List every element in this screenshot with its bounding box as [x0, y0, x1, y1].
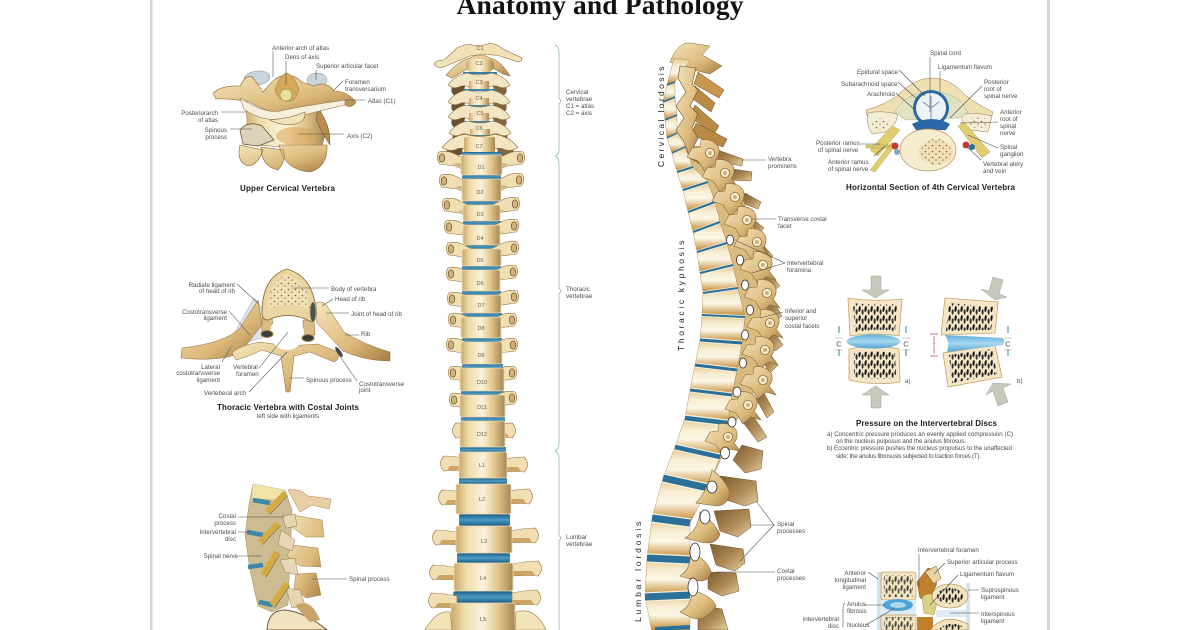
- lumbar costal processes: [680, 470, 730, 619]
- vertebra numbers: D6: [476, 281, 484, 287]
- labels: horizontal section: Subarachnoid space: [841, 81, 898, 88]
- panel: horizontal section of 4th cervical vertebra: [816, 50, 1024, 192]
- labels: lateral view: prominens: [768, 163, 797, 170]
- labels: upper cervical: Axis (C2): [347, 133, 372, 140]
- labels: upper cervical: Posteriorarch: [181, 110, 219, 117]
- labels: lateral view: foramina: [787, 267, 812, 274]
- vertebra numbers: C5: [476, 111, 484, 117]
- labels: spinal regions: vertebrae: [566, 541, 593, 548]
- vertebra numbers: C2: [475, 61, 483, 67]
- subheading: left side: left side with ligaments: [257, 413, 319, 420]
- labels: thoracic vertebra: [176, 282, 405, 397]
- vertebra numbers: D8: [477, 326, 485, 332]
- labels: thoracic vertebra: Costotransverse: [359, 381, 405, 388]
- illustration: lateral spinal column: [645, 43, 783, 630]
- panel: anterior view of the spine: [425, 43, 594, 630]
- vertebra numbers: L2: [479, 497, 485, 503]
- labels: upper cervical: transversarium: [345, 86, 386, 93]
- labels: pressure figures: b): [1017, 378, 1023, 385]
- illustration: horizontal section: [866, 78, 993, 172]
- labels: horizontal section: Spinal: [1000, 144, 1017, 151]
- labels: horizontal section: ganglion: [1000, 151, 1024, 158]
- labels: upper cervical: Atlas (C1): [368, 98, 396, 105]
- labels: pressure figures: C: [903, 340, 909, 348]
- vertebra numbers: L5: [480, 617, 486, 623]
- labels: horizontal section: Posterior ramus: [816, 140, 860, 147]
- disc rims: [645, 167, 745, 597]
- vertebra numbers: D9: [477, 353, 485, 359]
- curvature label: thoracic kyphosis: Thoracic kyphosis: [676, 239, 686, 351]
- labels: motion segment: Interspinous: [981, 611, 1015, 618]
- labels: horizontal section: Ligamentum flavum: [938, 64, 992, 71]
- top of cervical spine: [670, 43, 722, 74]
- illustration a: concentric pressure: [835, 276, 910, 408]
- facet stars: [687, 140, 723, 172]
- labels: upper cervical: Spinous: [205, 127, 227, 134]
- labels: horizontal section: [816, 50, 1024, 175]
- vertebra numbers: C6: [475, 126, 483, 132]
- labels: pressure figures: C: [836, 340, 842, 348]
- labels: spinal regions: vertebrae: [566, 96, 593, 103]
- vertebra numbers: L3: [481, 539, 487, 545]
- labels: lumbar segment: Intervertebral: [200, 529, 236, 536]
- labels: motion segment: Superior articular process: [947, 559, 1018, 566]
- labels: lumbar segment: Spinal process: [349, 576, 390, 583]
- cervical posterior elements: [676, 66, 700, 164]
- labels: pressure figures: a): [905, 378, 911, 385]
- labels: spinal regions: C2 = axis: [566, 110, 592, 117]
- labels: thoracic vertebra: Body of vertebra: [331, 286, 377, 293]
- labels: motion segment: [803, 547, 1019, 630]
- labels: lateral view: facet: [778, 223, 792, 230]
- vertebra numbers: L4: [480, 576, 486, 582]
- labels: lumbar segment: Costal: [218, 513, 236, 520]
- vertebra numbers: [475, 46, 487, 623]
- labels: lumbar segment: disc: [225, 536, 236, 543]
- description text: on the nucleus pulposus and the anulus fibrosus.: [836, 438, 966, 445]
- heading: horizontal section: Horizontal Section of 4th Cervical Vertebra: [846, 183, 1016, 192]
- labels: horizontal section: Spinal cord: [930, 50, 962, 57]
- labels: pressure figures: C: [1005, 340, 1011, 348]
- labels: thoracic vertebra: foramen: [236, 371, 259, 378]
- labels: motion segment: intervertebral: [803, 616, 839, 623]
- labels: thoracic vertebra: Spinous process: [306, 377, 352, 384]
- labels: horizontal section: Anterior: [1000, 109, 1022, 116]
- axis C2: [446, 55, 510, 78]
- labels: upper cervical: [181, 45, 396, 141]
- labels: thoracic vertebra: Radiate ligament: [189, 282, 235, 289]
- labels: lateral view: costal facets: [785, 323, 819, 330]
- labels: lumbar segment: [200, 513, 390, 583]
- description text: side; the anulus fibrosusis subjected to traction forces (T).: [836, 453, 981, 460]
- panel: lumbar spine with nerves: [200, 484, 390, 630]
- labels: lumbar segment: process: [214, 520, 236, 527]
- illustration: atlas and axis: [213, 69, 356, 172]
- labels: motion segment: Intervertebral foramen: [918, 547, 979, 554]
- labels: lateral view: [716, 156, 827, 582]
- labels: thoracic vertebra: Rib: [361, 331, 371, 338]
- labels: spinal regions: vertebrae: [566, 293, 593, 300]
- vertebra numbers: D7: [477, 303, 485, 309]
- panel: lateral view of the spine: [633, 43, 827, 630]
- description text: [827, 431, 1013, 460]
- panel: thoracic vertebra with costal joints: [176, 269, 405, 420]
- labels: thoracic vertebra: costotransverse: [176, 370, 221, 377]
- vertebra numbers: D10: [477, 380, 487, 386]
- description text: b) Eccentric pressure pushes the nucleus propulsus to the unaffected: [827, 445, 1013, 452]
- vertebra numbers: C3: [475, 80, 483, 86]
- labels: lateral view: Intervertebral: [787, 260, 823, 267]
- labels: upper cervical: process: [205, 134, 227, 141]
- labels: horizontal section: root of: [984, 86, 1002, 93]
- vertebra numbers: D11: [477, 405, 487, 411]
- labels: motion segment: Anulus: [847, 601, 866, 608]
- transverse processes: [437, 151, 467, 171]
- labels: horizontal section: and vein: [983, 168, 1007, 175]
- heading: upper cervical vertebra: Upper Cervical Vertebra: [240, 184, 336, 193]
- labels: motion segment: disc: [828, 623, 839, 630]
- labels: horizontal section: spinal: [1000, 123, 1016, 130]
- vertebra numbers: D5: [476, 258, 484, 264]
- heading: pressure on discs: Pressure on the Intervertebral Discs: [856, 419, 998, 428]
- labels: lumbar segment: Spinal nerve: [204, 553, 239, 560]
- labels: lateral view: superior: [785, 315, 807, 322]
- illustration: lumbar segment: [245, 484, 331, 630]
- curvature label: lumbar lordosis: Lumbar lordosis: [633, 520, 643, 622]
- labels: motion segment: Suprospinous: [981, 587, 1019, 594]
- poster left edge: [150, 0, 152, 630]
- labels: upper cervical: Superior articular facet: [316, 63, 379, 70]
- labels: motion segment: Ligamentum flavum: [960, 571, 1014, 578]
- vertebral bodies: [461, 155, 502, 175]
- labels: thoracic vertebra: Head of rib: [335, 296, 366, 303]
- vertebra numbers: C1: [476, 46, 484, 52]
- labels: spinal regions: Thoracic: [566, 286, 590, 293]
- vertebra numbers: D1: [477, 165, 485, 171]
- curvature label: cervical lordosis: Cervical lordosis: [656, 65, 666, 167]
- labels: horizontal section: root of: [1000, 116, 1018, 123]
- labels: thoracic vertebra: Lateral: [201, 364, 220, 371]
- illustration b: eccentric pressure: [930, 277, 1012, 406]
- labels: horizontal section: Vertebral atery: [983, 161, 1024, 168]
- labels: horizontal section: Epidural space: [857, 69, 898, 76]
- labels: spinal regions: Cervical: [566, 89, 588, 96]
- iliac wings: [425, 612, 452, 630]
- labels: horizontal section: nerve: [1000, 130, 1016, 137]
- labels: pressure figures: T: [932, 344, 936, 350]
- panel: motion segment section: [803, 547, 1019, 630]
- labels: motion segment: Nucleus: [847, 622, 869, 629]
- labels: horizontal section: of spinal nerve: [828, 166, 869, 173]
- vertebra numbers: D12: [477, 432, 487, 438]
- braces: [555, 45, 561, 630]
- vertebra numbers: D3: [476, 212, 484, 218]
- labels: horizontal section: spinal nerve: [984, 93, 1018, 100]
- intervertebral foramina: [688, 235, 754, 596]
- labels: lateral view: processes: [777, 575, 805, 582]
- labels: thoracic vertebra: Joint of head of rib: [351, 311, 402, 318]
- labels: lateral view: processes: [777, 528, 805, 535]
- labels: upper cervical: Dens of axis: [285, 54, 319, 61]
- vertebra numbers: C7: [475, 144, 483, 150]
- labels: pressure figures: [836, 340, 1023, 385]
- labels: upper cervical: Anterior arch of atlas: [272, 45, 329, 52]
- labels: lateral view: Costal: [777, 568, 795, 575]
- labels: lateral view: Inferior and: [785, 308, 817, 315]
- labels: motion segment: ligament: [981, 594, 1005, 601]
- atlas C1: [434, 43, 522, 68]
- labels: thoracic vertebra: Vertebral: [233, 364, 258, 371]
- vertebra numbers: D2: [476, 190, 484, 196]
- labels: horizontal section: Arachnoid: [867, 91, 895, 98]
- labels: lateral view: Vertebra: [768, 156, 792, 163]
- labels: thoracic vertebra: of head of rib: [199, 288, 236, 295]
- discs: [645, 82, 745, 629]
- illustration: anterior spinal column: [425, 43, 546, 630]
- labels: horizontal section: of spinal nerve: [818, 147, 859, 154]
- panel: pressure on the intervertebral discs: [827, 276, 1023, 460]
- labels: thoracic vertebra: Costotransverse: [182, 309, 228, 316]
- poster right edge: [1047, 0, 1050, 630]
- labels: motion segment: Anterior: [844, 570, 866, 577]
- labels: motion segment: longitudinal: [835, 577, 866, 584]
- pedicle band joining bodies to posterior elements: [685, 146, 768, 488]
- labels: spinal regions: C1 = atlas: [566, 103, 594, 110]
- labels: thoracic vertebra: joint: [358, 387, 371, 394]
- labels: horizontal section: Posterior: [984, 79, 1009, 86]
- bodies: [645, 58, 745, 630]
- labels: motion segment: fibrosis: [847, 608, 867, 615]
- labels: horizontal section: Anterior ramus: [828, 159, 869, 166]
- labels: motion segment: ligament: [843, 584, 866, 591]
- labels: spinal regions: Lumbar: [566, 534, 587, 541]
- spinous processes: [690, 72, 783, 630]
- labels: lateral view: Spinal: [777, 521, 794, 528]
- thoracic and lumbar discs: [462, 152, 501, 156]
- vertebra numbers: L1: [479, 463, 485, 469]
- vertebra numbers: D4: [476, 236, 484, 242]
- heading: thoracic vertebra: Thoracic Vertebra with Costal Joints: [217, 403, 360, 412]
- labels: spinal regions: [566, 89, 594, 548]
- labels: motion segment: ligament: [981, 618, 1005, 625]
- labels: thoracic vertebra: ligament: [204, 315, 227, 322]
- vertebra numbers: C4: [475, 96, 483, 102]
- description text: a) Concentric pressure produces an evenly applied compression (C): [827, 431, 1013, 438]
- labels: upper cervical: of atlas: [198, 117, 218, 124]
- labels: upper cervical: Foramen: [345, 79, 370, 86]
- illustration: motion segment: [877, 566, 970, 630]
- illustration: thoracic vertebra: [181, 269, 390, 392]
- labels: lateral view: Transverse costal: [778, 216, 827, 223]
- panel: upper cervical vertebra: [181, 45, 396, 193]
- labels: thoracic vertebra: ligament: [197, 377, 220, 384]
- labels: thoracic vertebra: Verteberal arch: [204, 390, 247, 397]
